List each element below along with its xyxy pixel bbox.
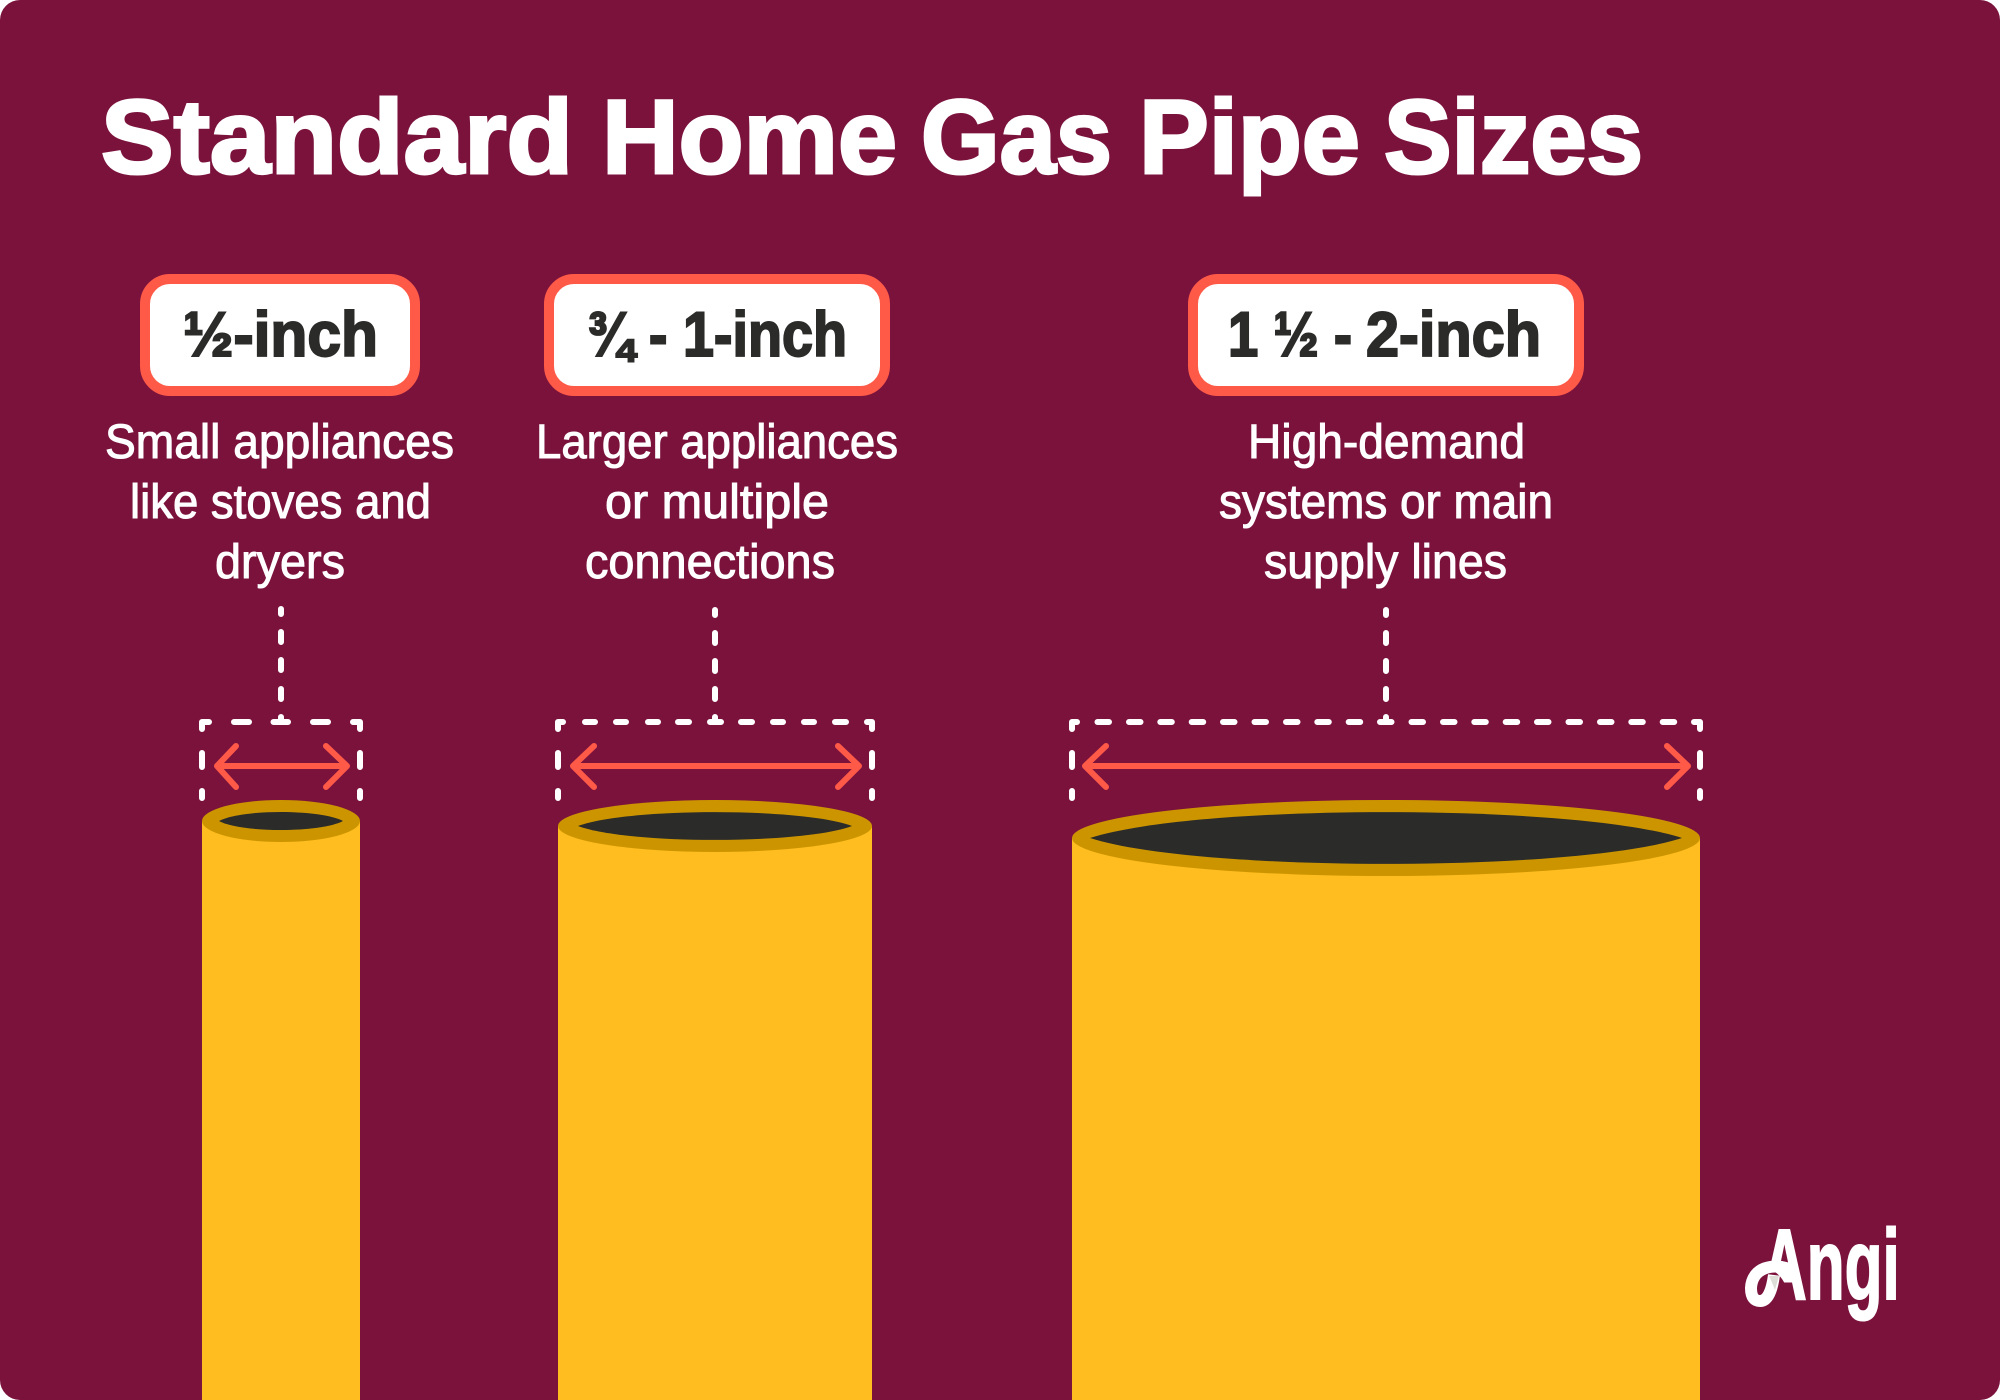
description: larger appliances: or multiple	[605, 476, 829, 529]
panel: half-inch pipe	[105, 279, 454, 1400]
description: high-demand systems: systems or main	[1219, 476, 1553, 529]
description: high-demand systems: High-demand	[1248, 416, 1525, 469]
title: Sizes	[1384, 79, 1643, 196]
size label: three-quarter to one inch	[549, 279, 885, 391]
pipe	[1072, 800, 1700, 1400]
title: Standard	[101, 79, 573, 196]
description: high-demand systems: supply lines	[1264, 536, 1507, 589]
size label: three-quarter to one inch: ¾ - 1-inch	[587, 300, 847, 370]
description: larger appliances	[536, 416, 898, 589]
size label: half inch: ½-inch	[183, 300, 378, 370]
dashed leader and measuring bracket	[1072, 610, 1700, 798]
title: Gas	[921, 79, 1112, 196]
arrow: pipe width	[573, 746, 859, 787]
pipe	[202, 800, 360, 1400]
panel: one and a half to two-inch pipe	[1072, 279, 1700, 1400]
arrow: pipe width	[217, 746, 347, 787]
title: Home	[602, 79, 897, 196]
size label: one and a half to two inch: 2-inch	[1366, 300, 1541, 370]
description: small appliances: like stoves and	[130, 476, 431, 529]
pipe	[558, 800, 872, 1400]
description: small appliances	[105, 416, 454, 589]
description: larger appliances: connections	[585, 536, 835, 589]
size label: half inch	[145, 279, 415, 391]
description: larger appliances: Larger appliances	[536, 416, 898, 469]
arrow: pipe width	[1085, 746, 1688, 787]
size label: one and a half to two inch	[1193, 279, 1579, 391]
dashed leader and measuring bracket	[558, 610, 872, 798]
description: small appliances: Small appliances	[105, 416, 454, 469]
size label: one and a half to two inch: 1 ½ -	[1228, 300, 1352, 370]
description: high-demand systems	[1219, 416, 1553, 589]
title: Pipe	[1139, 79, 1360, 196]
panel: three-quarter to one-inch pipe	[536, 279, 898, 1400]
logo: Angi: Angi	[1762, 1209, 1900, 1321]
description: small appliances: dryers	[215, 536, 345, 589]
dashed leader and measuring bracket	[202, 609, 360, 798]
title	[101, 79, 1643, 196]
